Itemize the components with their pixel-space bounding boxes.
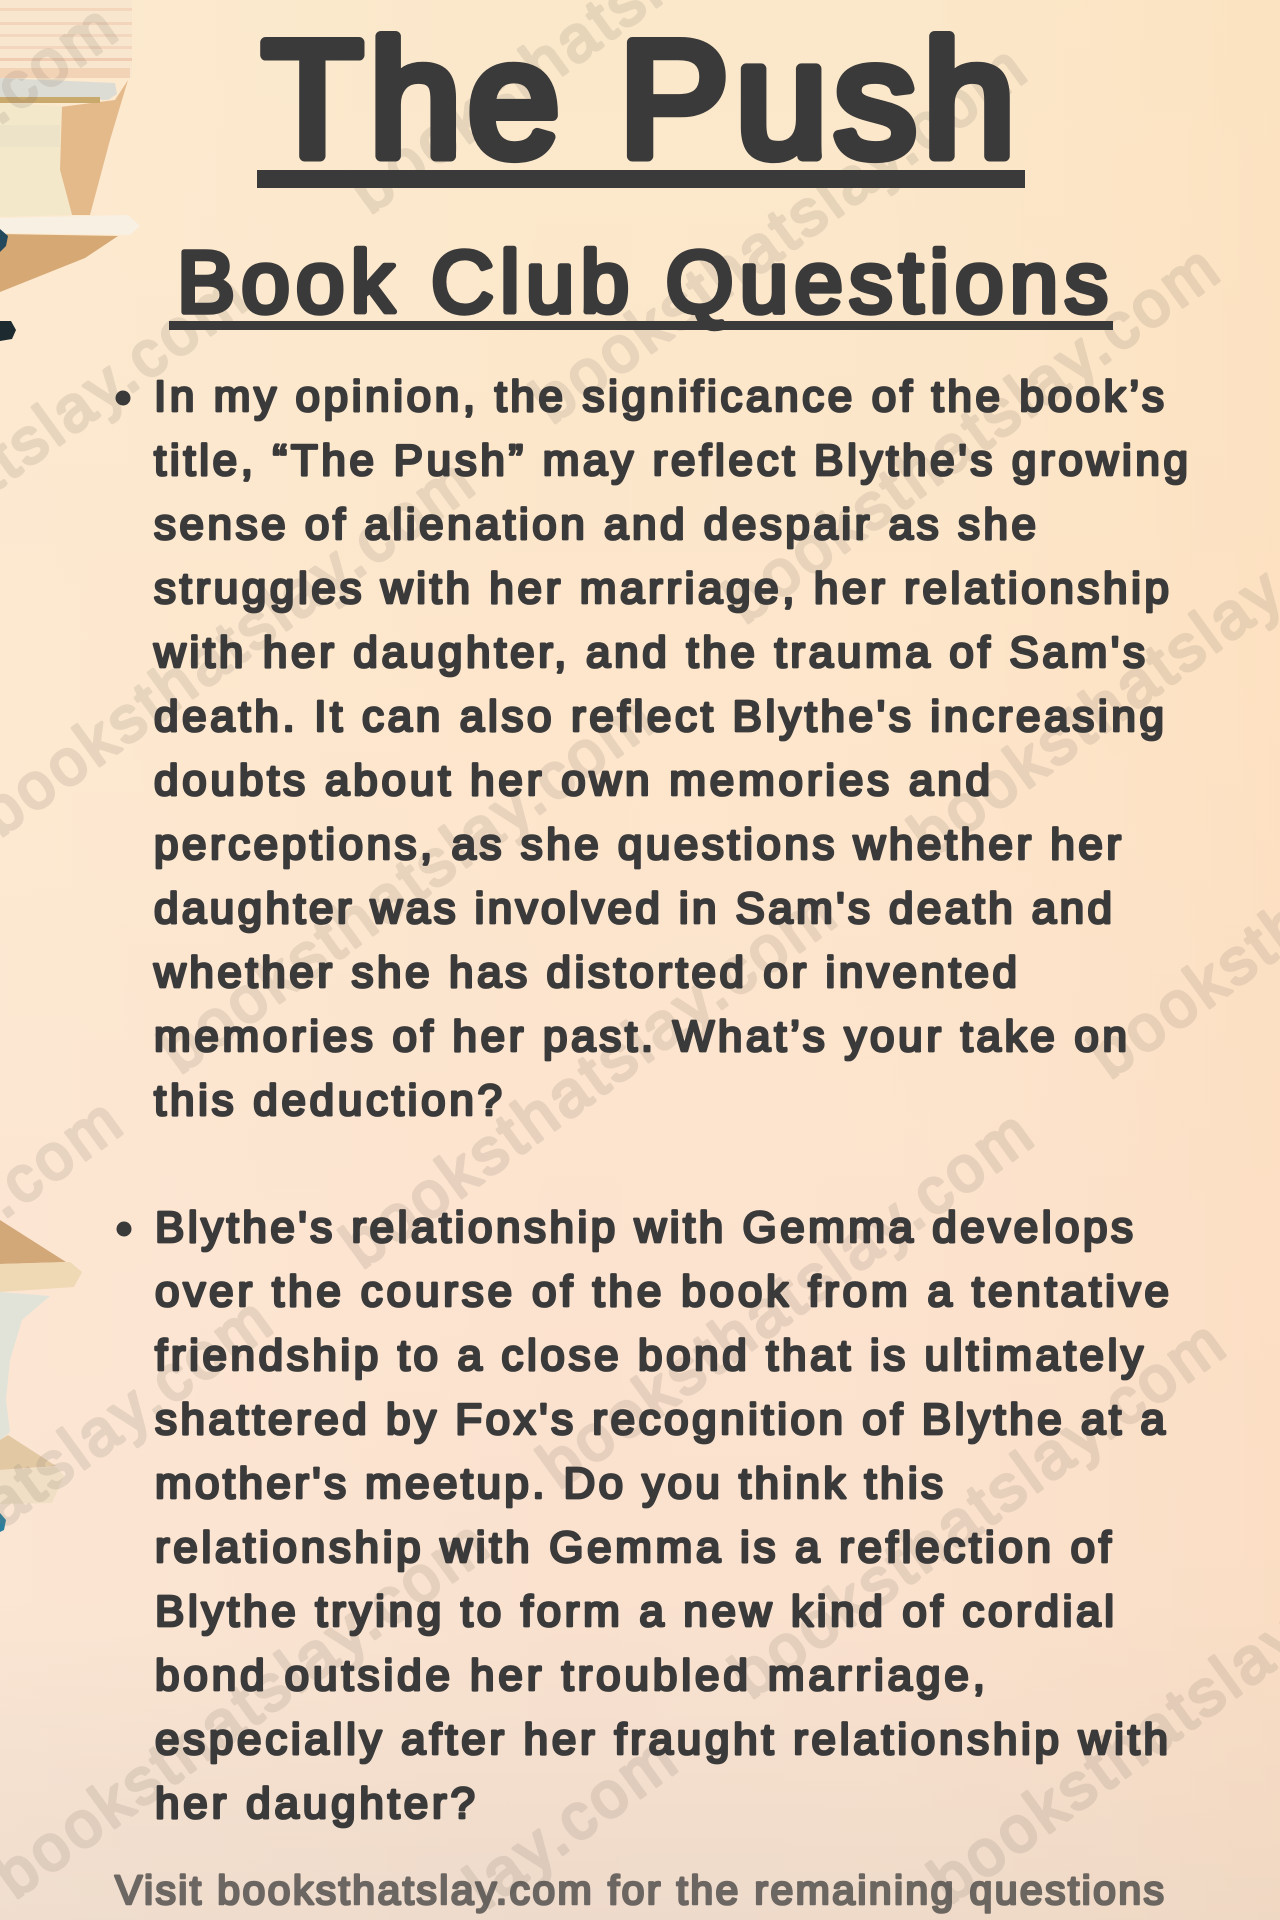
- question 2 bullet text: Blythe's relationship with Gemma develops: [155, 1203, 1133, 1252]
- question 2 bullet text: over the course of the book from a tentative: [155, 1267, 1169, 1316]
- question 1 bullet text: perceptions, as she questions whether her: [154, 820, 1121, 869]
- question 1 bullet text: In my opinion, the significance of the book’s: [154, 372, 1164, 421]
- question 1 bullet text: daughter was involved in Sam's death and: [154, 884, 1112, 933]
- illustration: stacked books mid left: [0, 1220, 82, 1532]
- watermark: booksthatslay.com: [146, 681, 666, 1086]
- question 1 bullet text: death. It can also reflect Blythe's increasing: [154, 692, 1164, 741]
- question 1 bullet text: title, “The Push” may reflect Blythe's growing: [154, 436, 1188, 485]
- watermark: lay.com: [452, 1722, 688, 1920]
- question 1 bullet text: sense of alienation and despair as she: [154, 500, 1036, 549]
- question 1 bullet text: this deduction?: [154, 1076, 502, 1125]
- question 2 bullet text: [116, 1203, 1169, 1828]
- question 2 bullet text: mother's meetup. Do you think this: [155, 1459, 943, 1508]
- question 2 bullet text: her daughter?: [155, 1779, 475, 1828]
- footer call to action: Visit booksthatslay.com for the remaining questions: [115, 1867, 1164, 1913]
- subtitle: Book Club Questions: [177, 234, 1108, 331]
- question 2 bullet text: bond outside her troubled marriage,: [155, 1651, 985, 1700]
- question 2 bullet text: especially after her fraught relationship with: [155, 1715, 1168, 1764]
- watermark: booksthatslay.com: [518, 31, 1038, 436]
- illustration: stacked books top left: [0, 0, 140, 341]
- question 1 bullet text: doubts about her own memories and: [154, 756, 990, 805]
- watermark: booksthatslay.com: [717, 1306, 1237, 1711]
- question 1 bullet text: whether she has distorted or invented: [153, 948, 1017, 997]
- watermark: booksthatslay.com: [711, 231, 1231, 636]
- question 2 bullet text: Blythe trying to form a new kind of cordial: [155, 1587, 1114, 1636]
- question 2 bullet text: shattered by Fox's recognition of Blythe at a: [155, 1395, 1166, 1444]
- watermark: booksthatslay.com: [328, 876, 848, 1281]
- watermark: booksthatslay.com: [525, 1096, 1045, 1501]
- question 2 bullet text: friendship to a close bond that is ultimately: [155, 1331, 1143, 1380]
- question 2 bullet text: relationship with Gemma is a reflection of: [155, 1523, 1112, 1572]
- question 1 bullet text: memories of her past. What’s your take on: [154, 1012, 1127, 1061]
- question 1 bullet text: struggles with her marriage, her relationship: [154, 564, 1169, 613]
- title: The Push: [262, 7, 1015, 191]
- question 1 bullet text: [116, 372, 1188, 1125]
- question 1 bullet text: with her daughter, and the trauma of Sam's: [153, 628, 1145, 677]
